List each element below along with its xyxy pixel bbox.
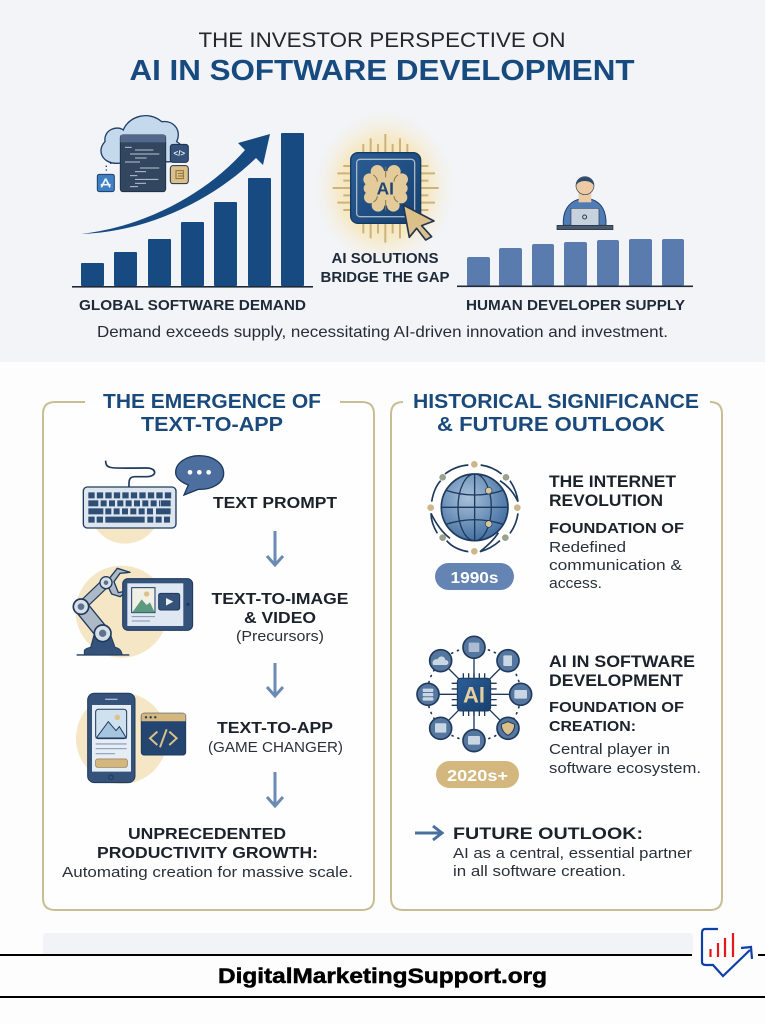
caption: Demand exceeds supply, necessitating AI-driven innovation and investment. [97, 324, 668, 341]
icon: AI hub network: AI [463, 682, 485, 707]
badge: 2020s+: 2020s+ [447, 768, 508, 785]
heading: historical significance: & FUTURE OUTLOOK [437, 414, 666, 436]
text: AI in software development: DEVELOPMENT [549, 672, 683, 690]
text: the internet revolution: FOUNDATION OF [549, 520, 684, 537]
arrow: step 3 to outcome [267, 772, 283, 806]
panel: historical significance and future outlook [391, 391, 722, 910]
text: unprecedented productivity growth: Automating creation for massive scale. [62, 864, 353, 881]
title: AI IN SOFTWARE DEVELOPMENT [130, 55, 635, 87]
text: AI in software development: Central player in [549, 741, 670, 758]
icon: robot arm and tablet [73, 566, 193, 658]
text: the internet revolution: REVOLUTION [549, 492, 663, 510]
icon: keyboard and speech bubble [83, 456, 224, 544]
icon: developer at laptop [557, 177, 613, 230]
label: text prompt: TEXT PROMPT [213, 495, 337, 512]
text: AI in software development: FOUNDATION OF [549, 699, 684, 716]
arrow: step 1 to 2 [267, 531, 283, 565]
heading: emergence [103, 391, 321, 436]
badge: 2020s+ [436, 761, 519, 788]
label: text-to-app: TEXT-TO-APP [217, 720, 333, 737]
icon: cloud with code window [97, 116, 188, 192]
text: future outlook: FUTURE OUTLOOK: [453, 825, 643, 843]
icon: AI chip with glow [308, 104, 460, 272]
text: the internet revolution [549, 473, 684, 592]
panel: hero band [0, 0, 765, 362]
label: text-to-image and video: TEXT-TO-IMAGE [212, 591, 349, 608]
text: unprecedented productivity growth: UNPRECEDENTED [128, 826, 286, 843]
text: future outlook: in all software creation. [453, 863, 626, 880]
title [130, 29, 635, 87]
bar chart: human developer supply [457, 239, 693, 287]
text: unprecedented productivity growth [62, 826, 353, 881]
bar chart: global software demand [72, 133, 313, 288]
text: AI solutions bridge the gap: AI SOLUTIONS [332, 251, 439, 267]
label: text-to-image and video: (Precursors) [236, 628, 324, 645]
icon: globe with orbit [427, 461, 521, 555]
text: AI in software development [549, 653, 701, 777]
icon: cloud with code window: </> [174, 149, 185, 158]
arrow: step 2 to 3 [267, 663, 283, 696]
text: AI in software development: software ecosystem. [549, 760, 701, 777]
label: human developer supply: HUMAN DEVELOPER SUPPLY [466, 297, 685, 314]
panel: the emergence of text-to-app [43, 391, 374, 910]
text: AI solutions bridge the gap [320, 251, 450, 286]
heading: emergence: THE EMERGENCE OF [103, 391, 321, 413]
text: the internet revolution: Redefined [549, 539, 626, 556]
text: the internet revolution: THE INTERNET [549, 473, 676, 491]
footer strip [0, 929, 765, 998]
label: global software demand: GLOBAL SOFTWARE DEMAND [79, 297, 306, 314]
arrow: rising demand [81, 134, 270, 234]
heading: emergence: TEXT-TO-APP [141, 414, 283, 436]
text: AI in software development: AI IN SOFTWARE [549, 653, 695, 671]
title: THE INVESTOR PERSPECTIVE ON [198, 29, 566, 52]
badge: 1990s [435, 563, 514, 590]
heading: historical significance [413, 391, 699, 436]
arrow: future outlook [415, 826, 442, 840]
footer website: DigitalMarketingSupport.org [218, 965, 547, 988]
text: AI solutions bridge the gap: BRIDGE THE GAP [320, 270, 450, 286]
text: AI in software development: CREATION: [549, 718, 636, 735]
badge: 1990s: 1990s [450, 570, 499, 587]
label: text-to-image and video: & VIDEO [244, 610, 316, 627]
icon: AI chip with glow: AI [377, 179, 394, 199]
icon: AI hub network [417, 636, 532, 752]
text: future outlook [453, 825, 692, 880]
icon: phone and code window [76, 693, 186, 784]
label: text-to-app: (GAME CHANGER) [208, 739, 343, 756]
text: the internet revolution: access. [549, 575, 602, 592]
icon: footer logo [702, 929, 752, 976]
heading: historical significance: HISTORICAL SIGNIFICANCE [413, 391, 699, 413]
text: the internet revolution: communication & [549, 557, 682, 574]
label: text-to-app [208, 720, 343, 756]
text: unprecedented productivity growth: PRODUCTIVITY GROWTH: [97, 845, 318, 862]
label: text-to-image and video [212, 591, 349, 645]
text: future outlook: AI as a central, essential partner [453, 845, 692, 862]
